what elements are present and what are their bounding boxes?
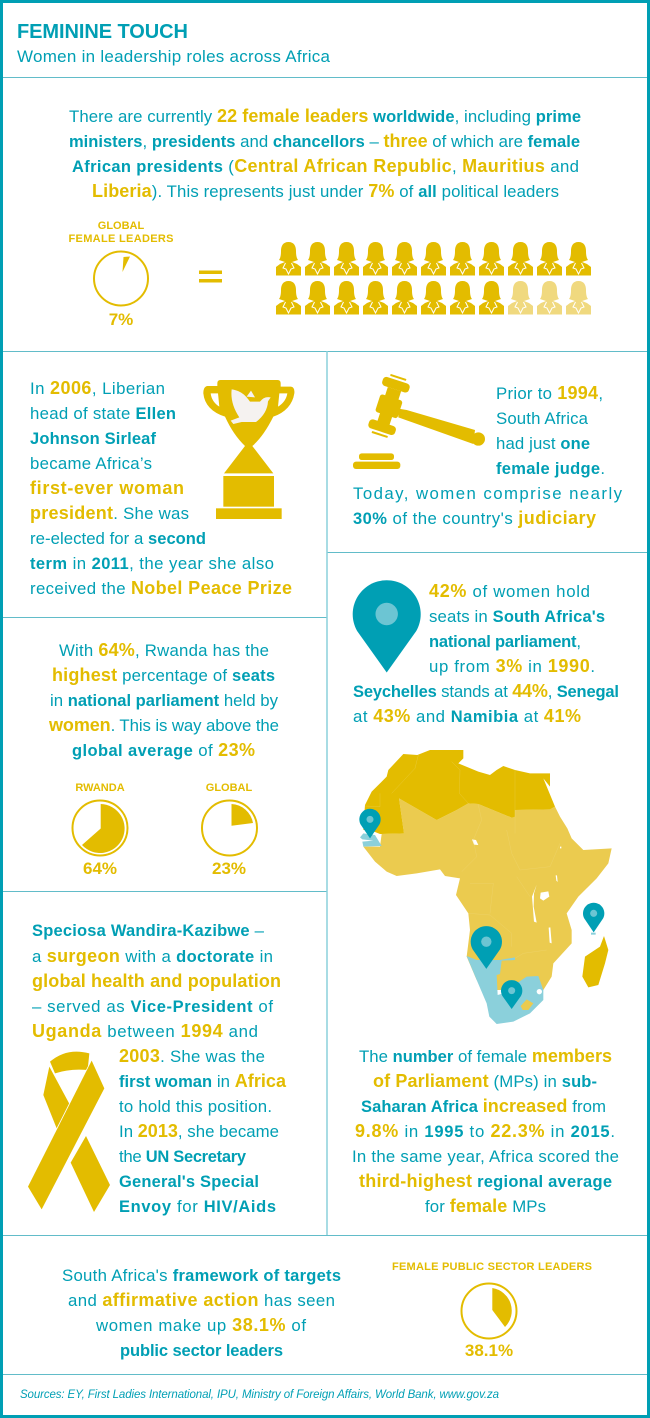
icon: large map pin [353,580,421,672]
text: Rwanda parliament: highest percentage of seats [52,665,275,685]
text: Speciosa: Speciosa Wandira-Kazibwe – [32,921,265,940]
panel: public sector leaders [62,1261,592,1360]
text: judiciary: Prior to 1994, [496,383,603,403]
pie label: global female leaders: FEMALE LEADERS [68,233,174,245]
text: framework of targets: public sector leaders [120,1342,283,1360]
pie: global 23% [202,782,257,878]
panel: Speciosa Wandira-Kazibwe [28,921,287,1216]
subtitle: Women in leadership roles across Africa [17,47,331,66]
text: first woman president: In 2006, Liberian [30,378,165,398]
text: members of parliament [352,1046,619,1216]
pin: Namibia [471,926,502,969]
text: first woman president: head of state Ellen [30,404,176,423]
pie label: global female leaders: GLOBAL [98,220,144,232]
text: Speciosa: first woman in Africa [119,1071,287,1091]
text: Rwanda parliament: in national parliament held by [50,691,279,710]
text: Speciosa: Uganda between 1994 and [32,1021,258,1041]
panel: global female leaders [68,106,591,329]
text: first woman president: president. She was [30,503,189,523]
intro text: Liberia). This represents just under 7% of all political leaders [92,181,559,201]
pie: Rwanda 64%: 64% [83,859,117,878]
text: Speciosa: the UN Secretary [119,1147,247,1166]
text: judiciary: South Africa [496,409,589,428]
pie: public sector 38.1% [392,1261,592,1360]
text: framework of targets: South Africa's framework of targets [62,1266,341,1285]
text: members of parliament: third-highest regional average [359,1171,612,1191]
text: Rwanda parliament: global average of 23% [72,740,255,760]
text: Speciosa: – served as Vice-President of [32,997,273,1016]
panel: women in parliament [352,580,619,1216]
text: framework of targets [62,1266,341,1360]
panel: Rwanda [48,640,279,878]
equals sign [199,270,222,282]
title: FEMININE TOUCH [17,21,188,43]
text: judiciary: female judge. [496,459,605,478]
text: 42 percent [353,581,619,726]
text: 42 percent: national parliament, [429,632,581,651]
text: first woman president: first-ever woman [30,478,184,498]
pie: Rwanda 64% [72,782,128,878]
text: Rwanda parliament: women. This is way above the [48,715,279,735]
text: 42 percent: Seychelles stands at 44%, Senegal [353,681,619,701]
text: framework of targets: and affirmative action has seen [68,1290,335,1310]
text: judiciary: 30% of the country's judiciary [353,508,596,528]
map: Africa [359,750,612,1024]
pin: South Africa [501,980,522,1009]
text: Speciosa: 2003. She was the [119,1046,265,1066]
pie: Rwanda 64%: RWANDA [75,782,125,794]
icon: pictogram of 22 women [276,242,591,314]
text: first woman president: received the Nobel Peace Prize [30,578,292,598]
intro text: ministers, presidents and chancellors – three of which are female [69,131,580,151]
sources: Sources: EY, First Ladies International, IPU, Ministry of Foreign Affairs, World Bank, www.gov.za [20,1389,499,1401]
text: members of parliament: 9.8% in 1995 to 22.3% in 2015. [355,1121,615,1141]
panel: South Africa judiciary [353,372,623,528]
pie: global 23%: GLOBAL [206,782,252,794]
text: first woman president: Johnson Sirleaf [30,430,156,448]
pie: public sector 38.1%: FEMALE PUBLIC SECTOR LEADERS [392,1261,592,1273]
pie label: global female leaders [68,220,174,245]
text: members of parliament: Saharan Africa increased from [361,1096,606,1116]
icon: awareness ribbon [28,1052,110,1212]
pin: Seychelles [583,903,604,932]
text: 42 percent: up from 3% in 1990. [429,656,595,676]
text: Rwanda parliament: With 64%, Rwanda has the [59,640,269,660]
text: Speciosa: In 2013, she became [119,1121,279,1141]
text: Rwanda parliament [48,640,279,760]
text: Speciosa: General's Special [119,1173,259,1191]
pie: public sector 38.1%: 38.1% [465,1341,513,1360]
panel: Ellen Johnson Sirleaf [30,378,294,598]
text: Speciosa: global health and population [32,971,281,991]
text: Speciosa: to hold this position. [119,1097,272,1116]
text: Speciosa: a surgeon with a doctorate in [32,946,273,966]
text: Speciosa [32,921,287,1216]
text: first woman president: became Africa’s [30,454,152,473]
text: members of parliament: for female MPs [425,1196,546,1216]
intro text: There are currently 22 female leaders worldwide, including prime [69,106,581,126]
icon: trophy with dove [203,380,294,519]
text: first woman president [30,378,292,598]
text: judiciary: had just one [496,434,590,453]
text: 42 percent: seats in South Africa's [429,607,605,626]
text: members of parliament: In the same year, Africa scored the [352,1147,619,1166]
text: judiciary: Today, women comprise nearly [353,484,623,503]
text: judiciary [353,383,623,528]
intro text: African presidents (Central African Republic, Mauritius and [72,156,579,176]
text: members of parliament: The number of female members [359,1046,612,1066]
text: members of parliament: of Parliament (MPs) in sub- [373,1071,597,1091]
intro text [69,106,581,201]
text: first woman president: term in 2011, the year she also [30,554,274,573]
text: 42 percent: 42% of women hold [429,581,590,601]
text: first woman president: re-elected for a second [30,529,206,548]
pie: global 23%: 23% [212,859,246,878]
pie value: 7%: 7% [109,310,133,329]
text: framework of targets: women make up 38.1% of [95,1315,306,1335]
pie chart: 7% [94,252,148,306]
text: 42 percent: at 43% and Namibia at 41% [353,706,581,726]
pin: Senegal [359,809,381,838]
text: Speciosa: Envoy for HIV/Aids [119,1197,276,1216]
icon: gavel [353,372,485,469]
